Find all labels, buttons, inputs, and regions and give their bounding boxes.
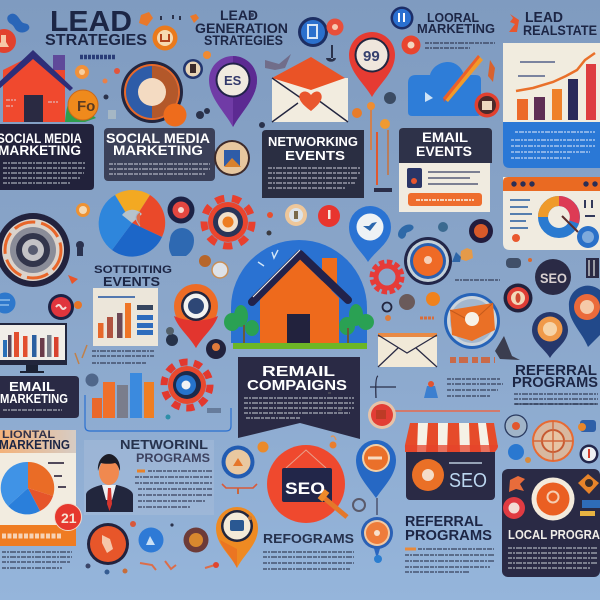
text: sorting events heading: SOTTDITING — [94, 264, 172, 276]
icon: gear bottom — [164, 362, 210, 408]
title: referral programs upper: REFERRAL — [515, 363, 597, 379]
panel: email marketing — [0, 376, 79, 418]
panel: social media marketing center: SOCIAL MEDIA — [106, 131, 210, 146]
text: reprograms block: REFOGRAMS — [263, 532, 354, 546]
title: local marketing — [417, 11, 495, 48]
chart card: sorting events — [93, 288, 158, 346]
panel: local marketing card — [0, 429, 82, 568]
blue badge — [0, 292, 16, 314]
icon: orange coin: Fo — [77, 98, 95, 115]
title: local marketing: MARKETING — [417, 21, 495, 36]
panel: networking events — [262, 130, 364, 198]
icon: blue logo top left — [7, 14, 29, 33]
icon: orange badge — [152, 26, 178, 50]
icon: brown badge bottom — [184, 528, 208, 552]
title: referral programs lower: PROGRAMS — [405, 528, 492, 544]
figure: businessperson with text — [84, 440, 214, 515]
title: local marketing: LOORAL — [427, 11, 479, 25]
panel: local programs — [502, 469, 600, 577]
panel: email marketing: EMAIL — [9, 380, 55, 394]
icon: blue orange badge — [222, 446, 254, 478]
icon: red jar badge — [474, 92, 500, 118]
title: referral programs upper: PROGRAMS — [512, 375, 598, 391]
pin: purple — [209, 56, 257, 127]
icon: red badge left — [0, 29, 16, 53]
panel: local marketing card: LIONTAL — [2, 429, 55, 441]
decorations: right scatter — [328, 222, 599, 410]
icon: orange coin — [65, 90, 98, 122]
title: networking programs: PROGRAMS — [136, 451, 210, 465]
panel: local marketing card: 21 — [61, 510, 77, 526]
icon: red connector badge — [368, 401, 500, 429]
panel: local marketing card: MARKETING — [0, 438, 70, 452]
panel: email events — [399, 128, 492, 212]
icon: orange red badge — [87, 523, 129, 565]
title: lead realstate: LEAD — [525, 9, 563, 26]
title: lead generation strategies: STRATEGIES — [204, 32, 283, 48]
panel: email marketing: MARKETING — [0, 392, 68, 406]
text: sorting events heading: EVENTS — [103, 275, 160, 289]
text: reprograms block — [263, 532, 354, 569]
label: small heading — [80, 55, 115, 59]
icon: blue badge — [390, 6, 414, 30]
icon: storefront seo: SEO — [449, 470, 487, 492]
pin: orange — [174, 284, 218, 348]
chart: pie — [99, 190, 165, 257]
icon: dark ring badge — [183, 59, 203, 79]
title: lead strategies: STRATEGIES — [45, 32, 147, 49]
icon: seo badge — [535, 259, 571, 295]
icon: dark orange badge — [469, 219, 493, 243]
pin: red: 99 — [363, 48, 380, 65]
title: lead realstate — [509, 9, 597, 38]
title: networking programs: NETWORINL — [120, 438, 208, 452]
icon: seo badge: SEO — [540, 270, 567, 286]
title: lead strategies — [45, 6, 147, 49]
icon: envelope with heart — [272, 57, 348, 122]
pin: cream orange — [532, 312, 568, 358]
icon: cream badge — [285, 204, 307, 226]
decorations: bottom scatter — [86, 436, 336, 574]
pin: purple: ES — [224, 73, 242, 88]
pin: orange bottom — [216, 507, 258, 568]
panel: email campaigns — [238, 357, 360, 439]
icon: bluish badge — [86, 374, 98, 386]
icon: red round — [318, 205, 340, 227]
decorations: top scatter — [102, 12, 291, 128]
chart card: real estate growth — [503, 43, 600, 168]
title: referral programs upper — [512, 363, 598, 399]
icon: red gear ring — [373, 263, 401, 291]
panel: social media marketing center — [104, 128, 215, 181]
title: lead generation strategies: GENERATION — [195, 20, 288, 36]
icon: target ring — [121, 61, 183, 123]
hero: central house — [224, 240, 374, 349]
title: referral programs lower — [405, 514, 494, 572]
title: lead generation strategies — [195, 7, 288, 48]
icon: small orange coin — [76, 203, 90, 217]
panel: social media marketing center: MARKETING — [113, 143, 203, 158]
chart: monitor with bars — [0, 323, 67, 373]
icons: upper right scatter — [505, 404, 598, 464]
icon: gear red — [204, 198, 252, 246]
icon: small red badge — [326, 18, 344, 36]
icon: brown ring badge — [214, 140, 250, 176]
icon: cream red badge — [504, 284, 532, 312]
panel: email campaigns: REMAIL — [262, 363, 335, 380]
gauge: target dial — [0, 213, 70, 287]
panel: email events: EVENTS — [416, 143, 472, 159]
icon: round envelope — [444, 293, 500, 349]
icon: seo sign circle — [267, 445, 347, 523]
icon: storefront seo — [405, 423, 498, 500]
icon: envelope outline — [378, 333, 437, 367]
icon: red round badge — [402, 36, 420, 54]
icon: seo sign circle: SEO — [285, 479, 325, 498]
title: lead strategies: LEAD — [50, 6, 132, 38]
title: referral programs lower: REFERRAL — [405, 514, 483, 530]
title: lead generation strategies: LEAD — [220, 7, 258, 23]
panel: social media marketing left — [0, 124, 94, 190]
decorations: middle scatter — [68, 212, 273, 364]
icon: blue badge bottom — [138, 528, 164, 552]
icon: red dark badge — [48, 294, 74, 320]
icon: folder with pencil — [408, 55, 483, 116]
pin: blue with orange — [356, 440, 396, 515]
decorations: stems and pins — [326, 45, 495, 192]
pin: red — [349, 32, 395, 97]
chart: blue outlined bars — [85, 373, 231, 431]
panel: email campaigns: COMPAIGNS — [247, 377, 347, 394]
panel: email events: EMAIL — [422, 129, 468, 145]
icon: orange ball — [164, 104, 186, 126]
panel: networking events: EVENTS — [285, 148, 345, 163]
pin: blue top right of house — [349, 206, 391, 262]
icon: blue orange node — [361, 517, 393, 563]
icon: navy badge — [168, 196, 194, 224]
icon: house — [0, 50, 73, 122]
icon: blue round badge — [298, 17, 328, 47]
text: sorting events heading — [94, 264, 172, 289]
icon: blue pin small — [169, 228, 194, 256]
panel: social media marketing left: MARKETING — [0, 143, 81, 158]
icon: target orange — [404, 237, 452, 285]
pin: dark orange right — [569, 286, 600, 347]
icon: hammer ring — [353, 499, 365, 511]
icon: small orange badge — [75, 65, 89, 79]
title: networking programs — [120, 438, 212, 507]
panel: networking events: NETWORKING — [268, 135, 358, 149]
panel: donut analytics card — [503, 177, 600, 250]
